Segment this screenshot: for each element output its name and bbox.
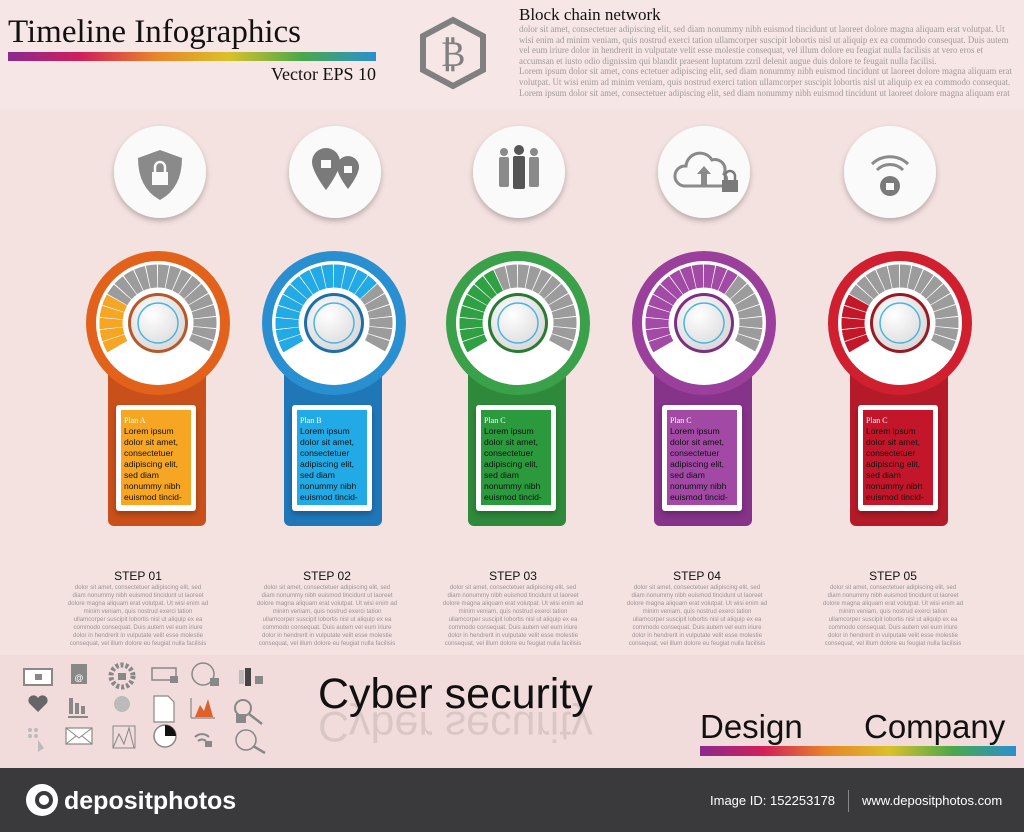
step 04 text: commodo consequat. Duis autem vel eum iriure <box>632 624 762 631</box>
icon circle: wifi lock <box>844 126 936 218</box>
text card: plan B: Lorem ipsum <box>300 426 350 436</box>
step 04 text: STEP 04 <box>673 569 721 583</box>
text card: plan C purple <box>662 405 742 511</box>
text card: plan C: adipiscing elit, <box>484 459 538 469</box>
step 02 text: dolor in hendrerit in vulputate velit esse molestie <box>262 632 393 639</box>
text card: plan A: adipiscing elit, <box>124 459 178 469</box>
step 05 text: diam nonummy nibh euismod tincidunt ut laoreet <box>827 592 959 599</box>
step 04 text: consequat, vel illum dolore eu feugiat nulla facilisis <box>629 640 765 647</box>
text card: plan C purple: consectetuer <box>670 448 719 458</box>
text card: plan B: nonummy nibh <box>300 481 357 491</box>
text card: plan B <box>292 405 372 511</box>
text card: plan C: euismod tincid- <box>484 492 542 502</box>
text card: plan C red <box>858 405 938 511</box>
footer bar: www.depositphotos.com <box>861 793 1002 808</box>
heading: cyber security with reflection: Cyber security <box>318 702 593 750</box>
text card: plan C purple: dolor sit amet, <box>670 437 724 447</box>
step 03 text: minim veniam, quis nostrud exerci tation <box>459 608 567 615</box>
text card: plan B: adipiscing elit, <box>300 459 354 469</box>
step 01 text: STEP 01 <box>114 569 162 583</box>
text card: plan B: dolor sit amet, <box>300 437 354 447</box>
heading: block chain network: accumsan et iusto odio dignissim qui blandit praesent luptatum zzril delenit augue duis dolore te feugait nulla facilisi. <box>519 56 937 66</box>
text card: plan C: Lorem ipsum <box>484 426 534 436</box>
text card: plan C purple: Plan C <box>670 416 692 425</box>
title: Vector EPS 10 <box>271 64 376 84</box>
step 05 text: consequat, vel illum dolore eu feugiat nulla facilisis <box>825 640 961 647</box>
panel: step 3 dial (green) <box>446 251 590 526</box>
step 01 text: commodo consequat. Duis autem vel eum iriure <box>73 624 203 631</box>
text card: plan C purple: Lorem ipsum <box>670 426 720 436</box>
step 02 text <box>257 569 397 647</box>
text card: plan C purple: sed diam <box>670 470 705 480</box>
text card: plan C red: nonummy nibh <box>866 481 923 491</box>
logo: depositphotos: depositphotos <box>64 787 236 815</box>
step 01 text: diam nonummy nibh euismod tincidunt ut laoreet <box>72 592 204 599</box>
heading: block chain network: vel eum iriure dolor in hendrerit in vulputate velit esse molestie consequat, vel illum dolore eu feugiat nulla facilisis at vero eros et <box>519 45 984 55</box>
step 03 text: commodo consequat. Duis autem vel eum iriure <box>448 624 578 631</box>
step 03 text: dolor sit amet, consectetuer adipiscing elit, sed <box>450 584 576 591</box>
panel: step 2 dial (blue) <box>262 251 406 526</box>
icon circle: people <box>473 126 565 218</box>
panel: step 1 dial (orange) <box>86 251 230 526</box>
text card: plan C: sed diam <box>484 470 519 480</box>
step 02 text: STEP 02 <box>303 569 351 583</box>
heading: cyber security with reflection: Cyber security <box>318 670 593 718</box>
step 01 text: dolor in hendrerit in vulputate velit esse molestie <box>73 632 204 639</box>
panel: step 4 dial (purple) <box>632 251 776 526</box>
step 05 text: minim veniam, quis nostrud exerci tation <box>839 608 947 615</box>
text card: plan A <box>116 405 196 511</box>
step 05 text: ullamcorper suscipit lobortis nisl ut aliquip ex ea <box>829 616 958 623</box>
heading: block chain network: wisi enim ad minim veniam, quis nostrud exerci tation ullamcorper suscipit lobortis nisl ut aliquip ex ea commodo consequat. Duis autem <box>519 35 1009 45</box>
heading: block chain network: volutpat. Ut wisi enim ad minim veniam, quis nostrud exerci tation ullamcorper suscipit lobortis nisl ut aliquip ex ea commodo consequat. <box>519 77 1010 87</box>
text card: plan C red: consectetuer <box>866 448 915 458</box>
icon circle: location pins <box>289 126 381 218</box>
icon grid: @ <box>74 673 84 683</box>
step 01 text: ullamcorper suscipit lobortis nisl ut aliquip ex ea <box>74 616 203 623</box>
text card: plan A: Lorem ipsum <box>124 426 174 436</box>
step 02 text: dolore magna aliquam erat volutpat. Ut wisi enim ad <box>257 600 397 607</box>
step 05 text: dolor in hendrerit in vulputate velit esse molestie <box>828 632 959 639</box>
text card: plan A: consectetuer <box>124 448 173 458</box>
text card: plan C red: Plan C <box>866 416 888 425</box>
icon grid <box>24 663 265 753</box>
step 02 text: consequat, vel illum dolore eu feugiat nulla facilisis <box>259 640 395 647</box>
text card: plan B: euismod tincid- <box>300 492 358 502</box>
title: Timeline Infographics <box>8 14 301 50</box>
panel: step 5 dial (red) <box>828 251 972 526</box>
step 03 text: ullamcorper suscipit lobortis nisl ut aliquip ex ea <box>449 616 578 623</box>
text card: plan B: sed diam <box>300 470 335 480</box>
text card: plan B: Plan B <box>300 416 322 425</box>
text card: plan A: Plan A <box>124 416 146 425</box>
step 03 text: dolor in hendrerit in vulputate velit esse molestie <box>448 632 579 639</box>
step 04 text <box>627 569 767 647</box>
text card: plan C red: dolor sit amet, <box>866 437 920 447</box>
step 02 text: diam nonummy nibh euismod tincidunt ut laoreet <box>261 592 393 599</box>
step 03 text <box>443 569 583 647</box>
step 02 text: commodo consequat. Duis autem vel eum iriure <box>262 624 392 631</box>
text card: plan C red: euismod tincid- <box>866 492 924 502</box>
title <box>8 14 376 84</box>
text card: plan C: consectetuer <box>484 448 533 458</box>
heading: cyber security with reflection <box>318 670 593 750</box>
heading: design company: Company <box>864 708 1006 745</box>
step 02 text: dolor sit amet, consectetuer adipiscing elit, sed <box>264 584 390 591</box>
footer bar: Image ID: 152253178 <box>710 793 835 808</box>
icon: bitcoin hexagon: ₿ <box>441 34 465 74</box>
text card: plan C red: sed diam <box>866 470 901 480</box>
text card: plan C purple: adipiscing elit, <box>670 459 724 469</box>
text card: plan C red: adipiscing elit, <box>866 459 920 469</box>
step 04 text: minim veniam, quis nostrud exerci tation <box>643 608 751 615</box>
heading: block chain network: dolor sit amet, consectetuer adipiscing elit, sed diam nonummy nibh euismod tincidunt ut laoreet dolore magna aliquam erat volutpat. Ut <box>519 24 1005 34</box>
icon circle: cloud lock <box>658 126 750 218</box>
step 01 text: consequat, vel illum dolore eu feugiat nulla facilisis <box>70 640 206 647</box>
step 05 text: dolor sit amet, consectetuer adipiscing elit, sed <box>830 584 956 591</box>
step 01 text: dolor sit amet, consectetuer adipiscing elit, sed <box>75 584 201 591</box>
step 03 text: STEP 03 <box>489 569 537 583</box>
text card: plan C: Plan C <box>484 416 506 425</box>
step 03 text: consequat, vel illum dolore eu feugiat nulla facilisis <box>445 640 581 647</box>
text card: plan B: consectetuer <box>300 448 349 458</box>
heading: design company <box>700 708 1016 756</box>
step 05 text: dolore magna aliquam erat volutpat. Ut wisi enim ad <box>823 600 963 607</box>
step texts <box>68 569 963 647</box>
text card: plan A: euismod tincid- <box>124 492 182 502</box>
heading: block chain network: Block chain network <box>519 5 661 24</box>
step 02 text: ullamcorper suscipit lobortis nisl ut aliquip ex ea <box>263 616 392 623</box>
text card: plan C red: Lorem ipsum <box>866 426 916 436</box>
step 04 text: dolor sit amet, consectetuer adipiscing elit, sed <box>634 584 760 591</box>
step 05 text: commodo consequat. Duis autem vel eum iriure <box>828 624 958 631</box>
heading: block chain network: Lorem ipsum dolor sit amet, consectetuer adipiscing elit, sed diam nonummy nibh euismod tincidunt ut laoreet dolore magna aliquam erat <box>519 88 1010 98</box>
text card: plan C: dolor sit amet, <box>484 437 538 447</box>
step 04 text: ullamcorper suscipit lobortis nisl ut aliquip ex ea <box>633 616 762 623</box>
step 03 text: diam nonummy nibh euismod tincidunt ut laoreet <box>447 592 579 599</box>
step 01 text <box>68 569 208 647</box>
step 05 text <box>823 569 963 647</box>
text card: plan A: sed diam <box>124 470 159 480</box>
text card: plan C purple: nonummy nibh <box>670 481 727 491</box>
text card: plan C <box>476 405 556 511</box>
step 05 text: STEP 05 <box>869 569 917 583</box>
step 03 text: dolore magna aliquam erat volutpat. Ut wisi enim ad <box>443 600 583 607</box>
footer bar <box>0 768 1024 832</box>
heading: block chain network <box>519 5 1012 98</box>
icon circle: shield <box>114 126 206 218</box>
text card: plan C: nonummy nibh <box>484 481 541 491</box>
heading: block chain network: Lorem ipsum dolor sit amet, cons ectetuer adipiscing elit, sed diam nonummy nibh euismod tincidunt ut laoreet dolore magna aliquam erat <box>519 66 1012 76</box>
step 04 text: diam nonummy nibh euismod tincidunt ut laoreet <box>631 592 763 599</box>
text card: plan A: dolor sit amet, <box>124 437 178 447</box>
text card: plan A: nonummy nibh <box>124 481 181 491</box>
text card: plan C purple: euismod tincid- <box>670 492 728 502</box>
step 01 text: minim veniam, quis nostrud exerci tation <box>84 608 192 615</box>
step 01 text: dolore magna aliquam erat volutpat. Ut wisi enim ad <box>68 600 208 607</box>
icon: bitcoin hexagon <box>423 20 483 86</box>
step 04 text: dolore magna aliquam erat volutpat. Ut wisi enim ad <box>627 600 767 607</box>
step 04 text: dolor in hendrerit in vulputate velit esse molestie <box>632 632 763 639</box>
step 02 text: minim veniam, quis nostrud exerci tation <box>273 608 381 615</box>
heading: design company: Design <box>700 708 803 745</box>
